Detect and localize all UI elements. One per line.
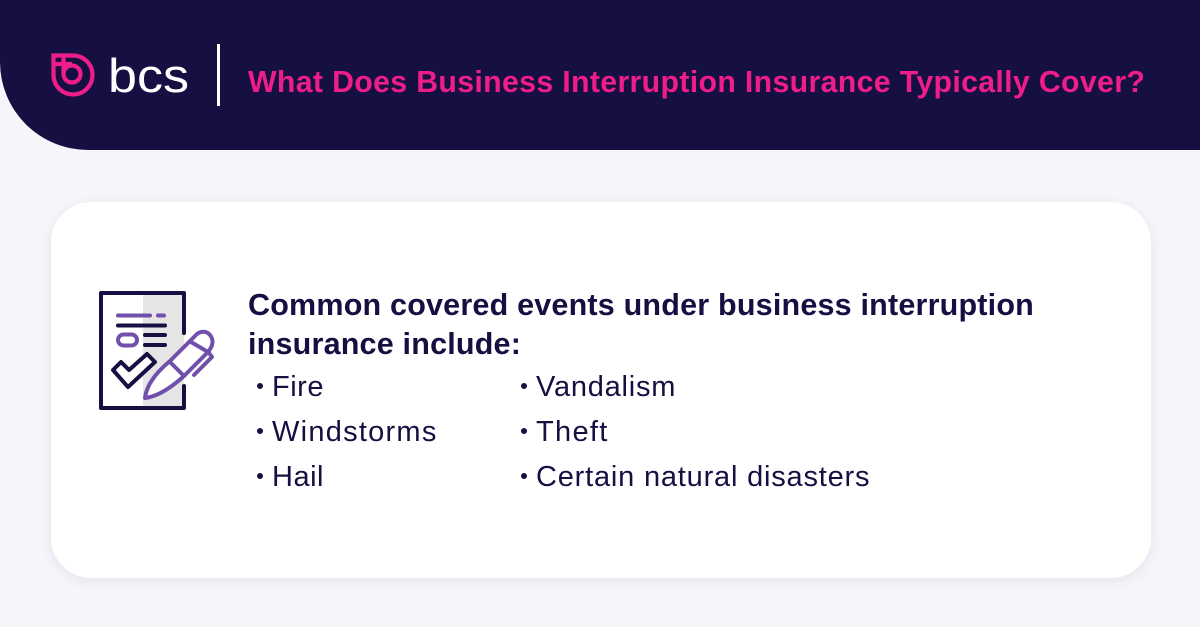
- heading: common covered events: insurance include:: [248, 327, 521, 361]
- panel: covered events card: [51, 202, 1151, 578]
- item: hail: Hail: [272, 461, 324, 493]
- item: fire: Fire: [272, 371, 324, 403]
- logo divider: [217, 44, 220, 106]
- item: theft: Theft: [536, 416, 609, 448]
- icon: document with pen: [99, 291, 214, 410]
- heading: common covered events: [248, 288, 1034, 361]
- list: right column: [521, 371, 870, 493]
- title: What Does Business Interruption Insurance Typically Cover?: [248, 66, 1145, 99]
- item: vandalism: Vandalism: [536, 371, 676, 403]
- list: left column: [257, 371, 438, 493]
- item: windstorms: Windstorms: [272, 416, 438, 448]
- logo: [51, 49, 189, 102]
- header band: [0, 0, 1200, 150]
- item: certain natural disasters: Certain natural disasters: [536, 461, 870, 493]
- heading: common covered events: Common covered events under business interruption: [248, 288, 1034, 322]
- logo: bcs: [108, 49, 189, 102]
